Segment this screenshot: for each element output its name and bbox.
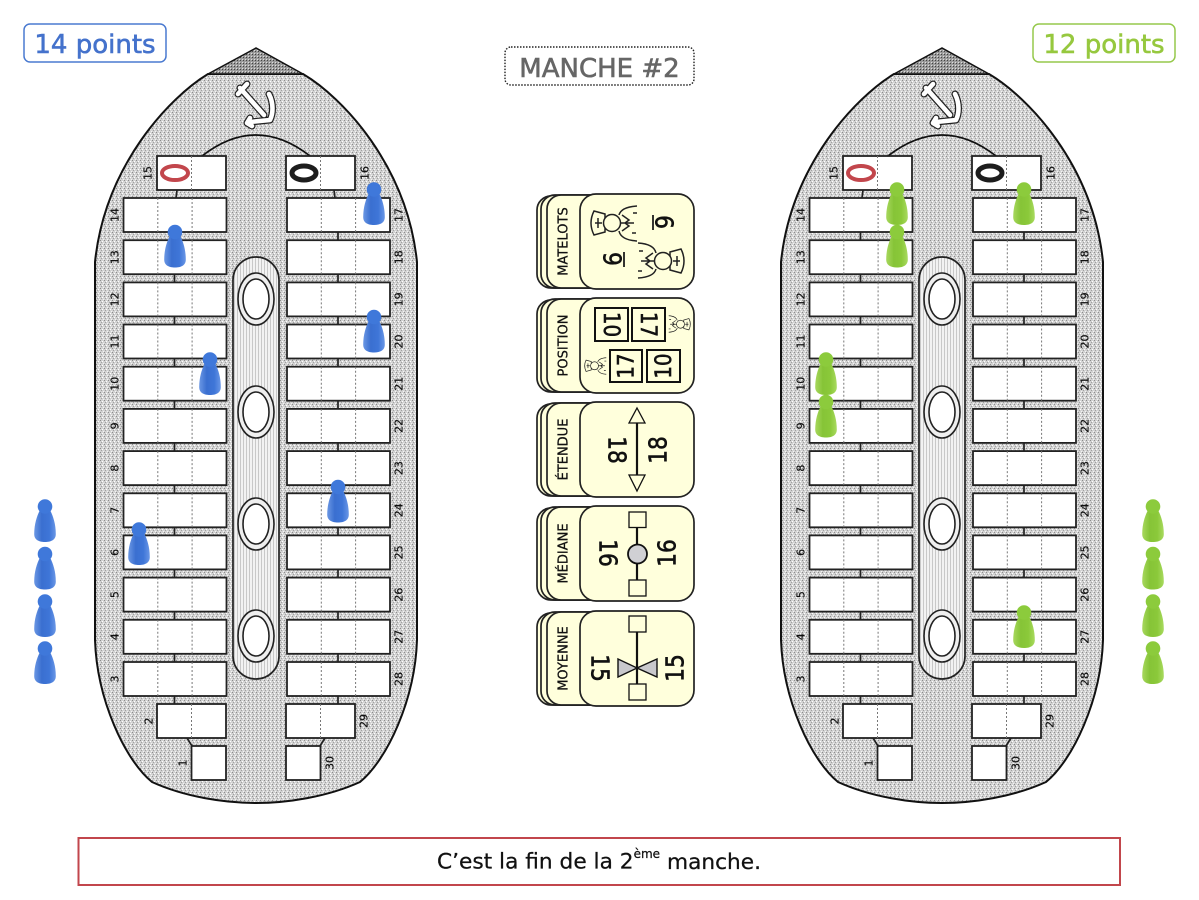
boat board: green team (781, 48, 1103, 803)
squares 2, 29, 1, 30 (142, 704, 370, 780)
card stack: position: 17 (636, 312, 661, 337)
squares 17 to 28: 25 (1078, 545, 1092, 559)
card stack: moyenne (537, 611, 694, 706)
squares 17 to 28: 23 (392, 461, 406, 475)
card stack: position: 10 (651, 353, 676, 379)
card stack: matelots: MATELOTS (556, 207, 572, 276)
squares 2, 29, 1, 30: 29 (1044, 714, 1056, 728)
square 15 with red ring (142, 156, 226, 190)
squares 14 to 3: 10 (108, 377, 122, 391)
message banner: C’est la fin de la 2 (437, 850, 634, 874)
squares 14 to 3: 10 (794, 377, 808, 391)
squares 14 to 3: 12 (108, 292, 122, 306)
score: blue team 14 points (24, 24, 166, 62)
squares 17 to 28: 27 (392, 630, 406, 644)
squares 17 to 28: 27 (1078, 630, 1092, 644)
square 16 with black ring (972, 156, 1058, 190)
blue pawns in reserve (34, 499, 56, 684)
square 16 with black ring: 16 (358, 166, 372, 180)
squares 17 to 28: 22 (392, 419, 406, 433)
card stack: position: 10 (599, 312, 624, 337)
squares 14 to 3: 14 (794, 208, 808, 222)
squares 17 to 28: 21 (392, 377, 406, 391)
card stack: médiane (537, 506, 694, 601)
score: green team 12 points: 12 points (1043, 30, 1165, 60)
squares 17 to 28 (973, 198, 1092, 696)
squares 2, 29, 1, 30: 1 (176, 760, 190, 766)
squares 17 to 28 (287, 198, 406, 696)
card stack: matelots (537, 194, 694, 289)
squares 17 to 28: 18 (1078, 250, 1092, 264)
card stack: étendue: 18 (643, 436, 673, 464)
round title (505, 47, 694, 85)
card stack: étendue (537, 402, 694, 497)
squares 14 to 3 (108, 198, 226, 696)
green pawns in reserve (1142, 499, 1164, 684)
card stack: moyenne: 15 (660, 654, 690, 682)
card stack: étendue: ÉTENDUE (556, 419, 572, 480)
squares 17 to 28: 28 (392, 672, 406, 686)
squares 17 to 28: 28 (1078, 672, 1092, 686)
card stack: position: 17 (613, 353, 639, 379)
squares 2, 29, 1, 30: 2 (828, 718, 842, 724)
squares 14 to 3: 12 (794, 292, 808, 306)
card stack: matelots: 6 (649, 215, 679, 229)
squares 14 to 3: 11 (108, 334, 122, 348)
green pawns on board (815, 182, 1035, 648)
squares 14 to 3: 3 (794, 676, 808, 682)
squares 14 to 3: 8 (108, 465, 122, 472)
card stack: position (537, 298, 694, 393)
squares 14 to 3: 6 (794, 549, 808, 556)
squares 2, 29, 1, 30: 30 (324, 756, 336, 770)
square 16 with black ring (286, 156, 372, 190)
squares 14 to 3: 4 (108, 633, 122, 640)
squares 14 to 3: 7 (108, 507, 122, 514)
squares 14 to 3: 8 (794, 465, 808, 472)
squares 14 to 3: 5 (794, 591, 808, 598)
card stack: étendue: 18 (602, 436, 632, 464)
square 15 with red ring (828, 156, 912, 190)
squares 17 to 28: 23 (1078, 461, 1092, 475)
round title: MANCHE #2 (519, 54, 680, 84)
card stack: moyenne: MOYENNE (556, 626, 572, 691)
blue pawns on board (128, 182, 385, 565)
squares 14 to 3: 11 (794, 334, 808, 348)
square 15 with red ring: 15 (828, 166, 840, 180)
squares 17 to 28: 21 (1078, 377, 1092, 391)
squares 14 to 3: 13 (794, 250, 808, 264)
squares 17 to 28: 25 (392, 545, 406, 559)
squares 14 to 3: 14 (108, 208, 122, 222)
squares 17 to 28: 20 (1078, 334, 1092, 348)
card stack: médiane: 16 (652, 539, 682, 567)
squares 17 to 28: 24 (1078, 503, 1092, 517)
squares 17 to 28: 17 (1078, 208, 1092, 222)
squares 17 to 28: 22 (1078, 419, 1092, 433)
squares 14 to 3: 6 (108, 549, 122, 556)
squares 17 to 28: 19 (1078, 292, 1092, 306)
score: blue team 14 points: 14 points (34, 30, 156, 60)
squares 14 to 3: 9 (108, 422, 122, 429)
boat board: blue team (95, 48, 417, 803)
squares 17 to 28: 24 (392, 503, 406, 517)
squares 2, 29, 1, 30: 30 (1010, 756, 1022, 770)
card stack: médiane: MÉDIANE (556, 523, 572, 584)
message banner (78, 838, 1120, 885)
squares 2, 29, 1, 30 (828, 704, 1056, 780)
message banner: manche. (660, 850, 761, 874)
squares 17 to 28: 20 (392, 334, 406, 348)
squares 2, 29, 1, 30: 29 (358, 714, 370, 728)
card stack: médiane: 16 (593, 539, 623, 567)
squares 14 to 3 (794, 198, 912, 696)
squares 17 to 28: 18 (392, 250, 406, 264)
squares 17 to 28: 26 (392, 588, 406, 602)
squares 14 to 3: 4 (794, 633, 808, 640)
score: green team 12 points (1033, 24, 1175, 62)
squares 14 to 3: 5 (108, 591, 122, 598)
squares 17 to 28: 19 (392, 292, 406, 306)
card stack: moyenne: 15 (585, 654, 615, 682)
squares 2, 29, 1, 30: 2 (142, 718, 156, 724)
squares 17 to 28: 26 (1078, 588, 1092, 602)
square 15 with red ring: 15 (142, 166, 154, 180)
squares 14 to 3: 3 (108, 676, 122, 682)
square 16 with black ring: 16 (1044, 166, 1058, 180)
card stack: matelots: 6 (598, 252, 628, 266)
message banner: ème (634, 847, 660, 861)
squares 14 to 3: 13 (108, 250, 122, 264)
card stack: position: POSITION (556, 315, 572, 376)
squares 17 to 28: 17 (392, 208, 406, 222)
squares 2, 29, 1, 30: 1 (862, 760, 876, 766)
squares 14 to 3: 9 (794, 422, 808, 429)
squares 14 to 3: 7 (794, 507, 808, 514)
